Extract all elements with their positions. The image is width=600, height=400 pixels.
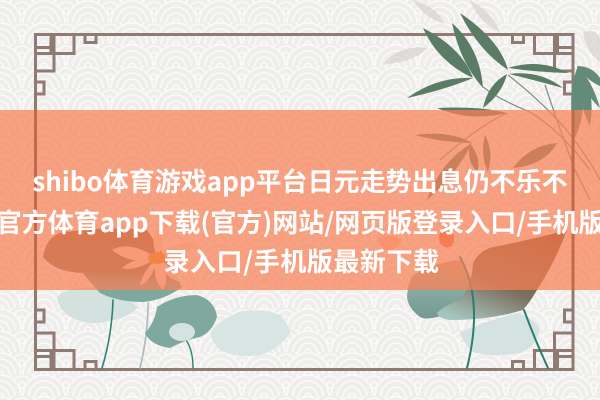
pale lotus leaf — [57, 287, 138, 323]
frame corner: top right — [512, 34, 573, 94]
stems — [102, 300, 193, 368]
large lotus leaf — [43, 229, 182, 302]
decorative frame — [36, 34, 573, 370]
faint flower — [378, 235, 402, 250]
bamboo leaves — [407, 13, 568, 200]
bamboo branch — [407, 13, 600, 200]
title text — [0, 162, 600, 279]
lotus group: left — [43, 228, 290, 368]
frame corner: bottom left — [36, 310, 96, 370]
leaf highlight — [169, 323, 195, 341]
lotus group: right — [378, 225, 567, 368]
small teal leaf — [407, 260, 478, 318]
shadow of bamboo leaves — [383, 0, 600, 64]
pale lotus leaf far right — [210, 311, 290, 356]
bamboo leaves right cluster — [571, 66, 600, 138]
frame corner: top left — [36, 34, 96, 94]
frame corner: bottom right — [512, 310, 573, 370]
stems — [460, 257, 548, 368]
small flower — [439, 225, 454, 247]
large lotus leaf — [437, 230, 567, 320]
teal lotus leaf — [145, 295, 217, 348]
title line 1: shibo体育游戏app平台日元走势出息仍不乐不 — [32, 162, 568, 199]
pale lotus leaf — [460, 313, 540, 355]
title line 2: 官方体育app下载(官方)网站/网页版登录入口/手机版 — [0, 203, 600, 240]
frame tint inside band — [36, 110, 573, 290]
lotus flower — [112, 228, 197, 290]
title line 3: 录入口/手机版最新下载 — [163, 242, 440, 279]
salmon band — [0, 110, 600, 290]
bamboo stems — [440, 75, 600, 200]
